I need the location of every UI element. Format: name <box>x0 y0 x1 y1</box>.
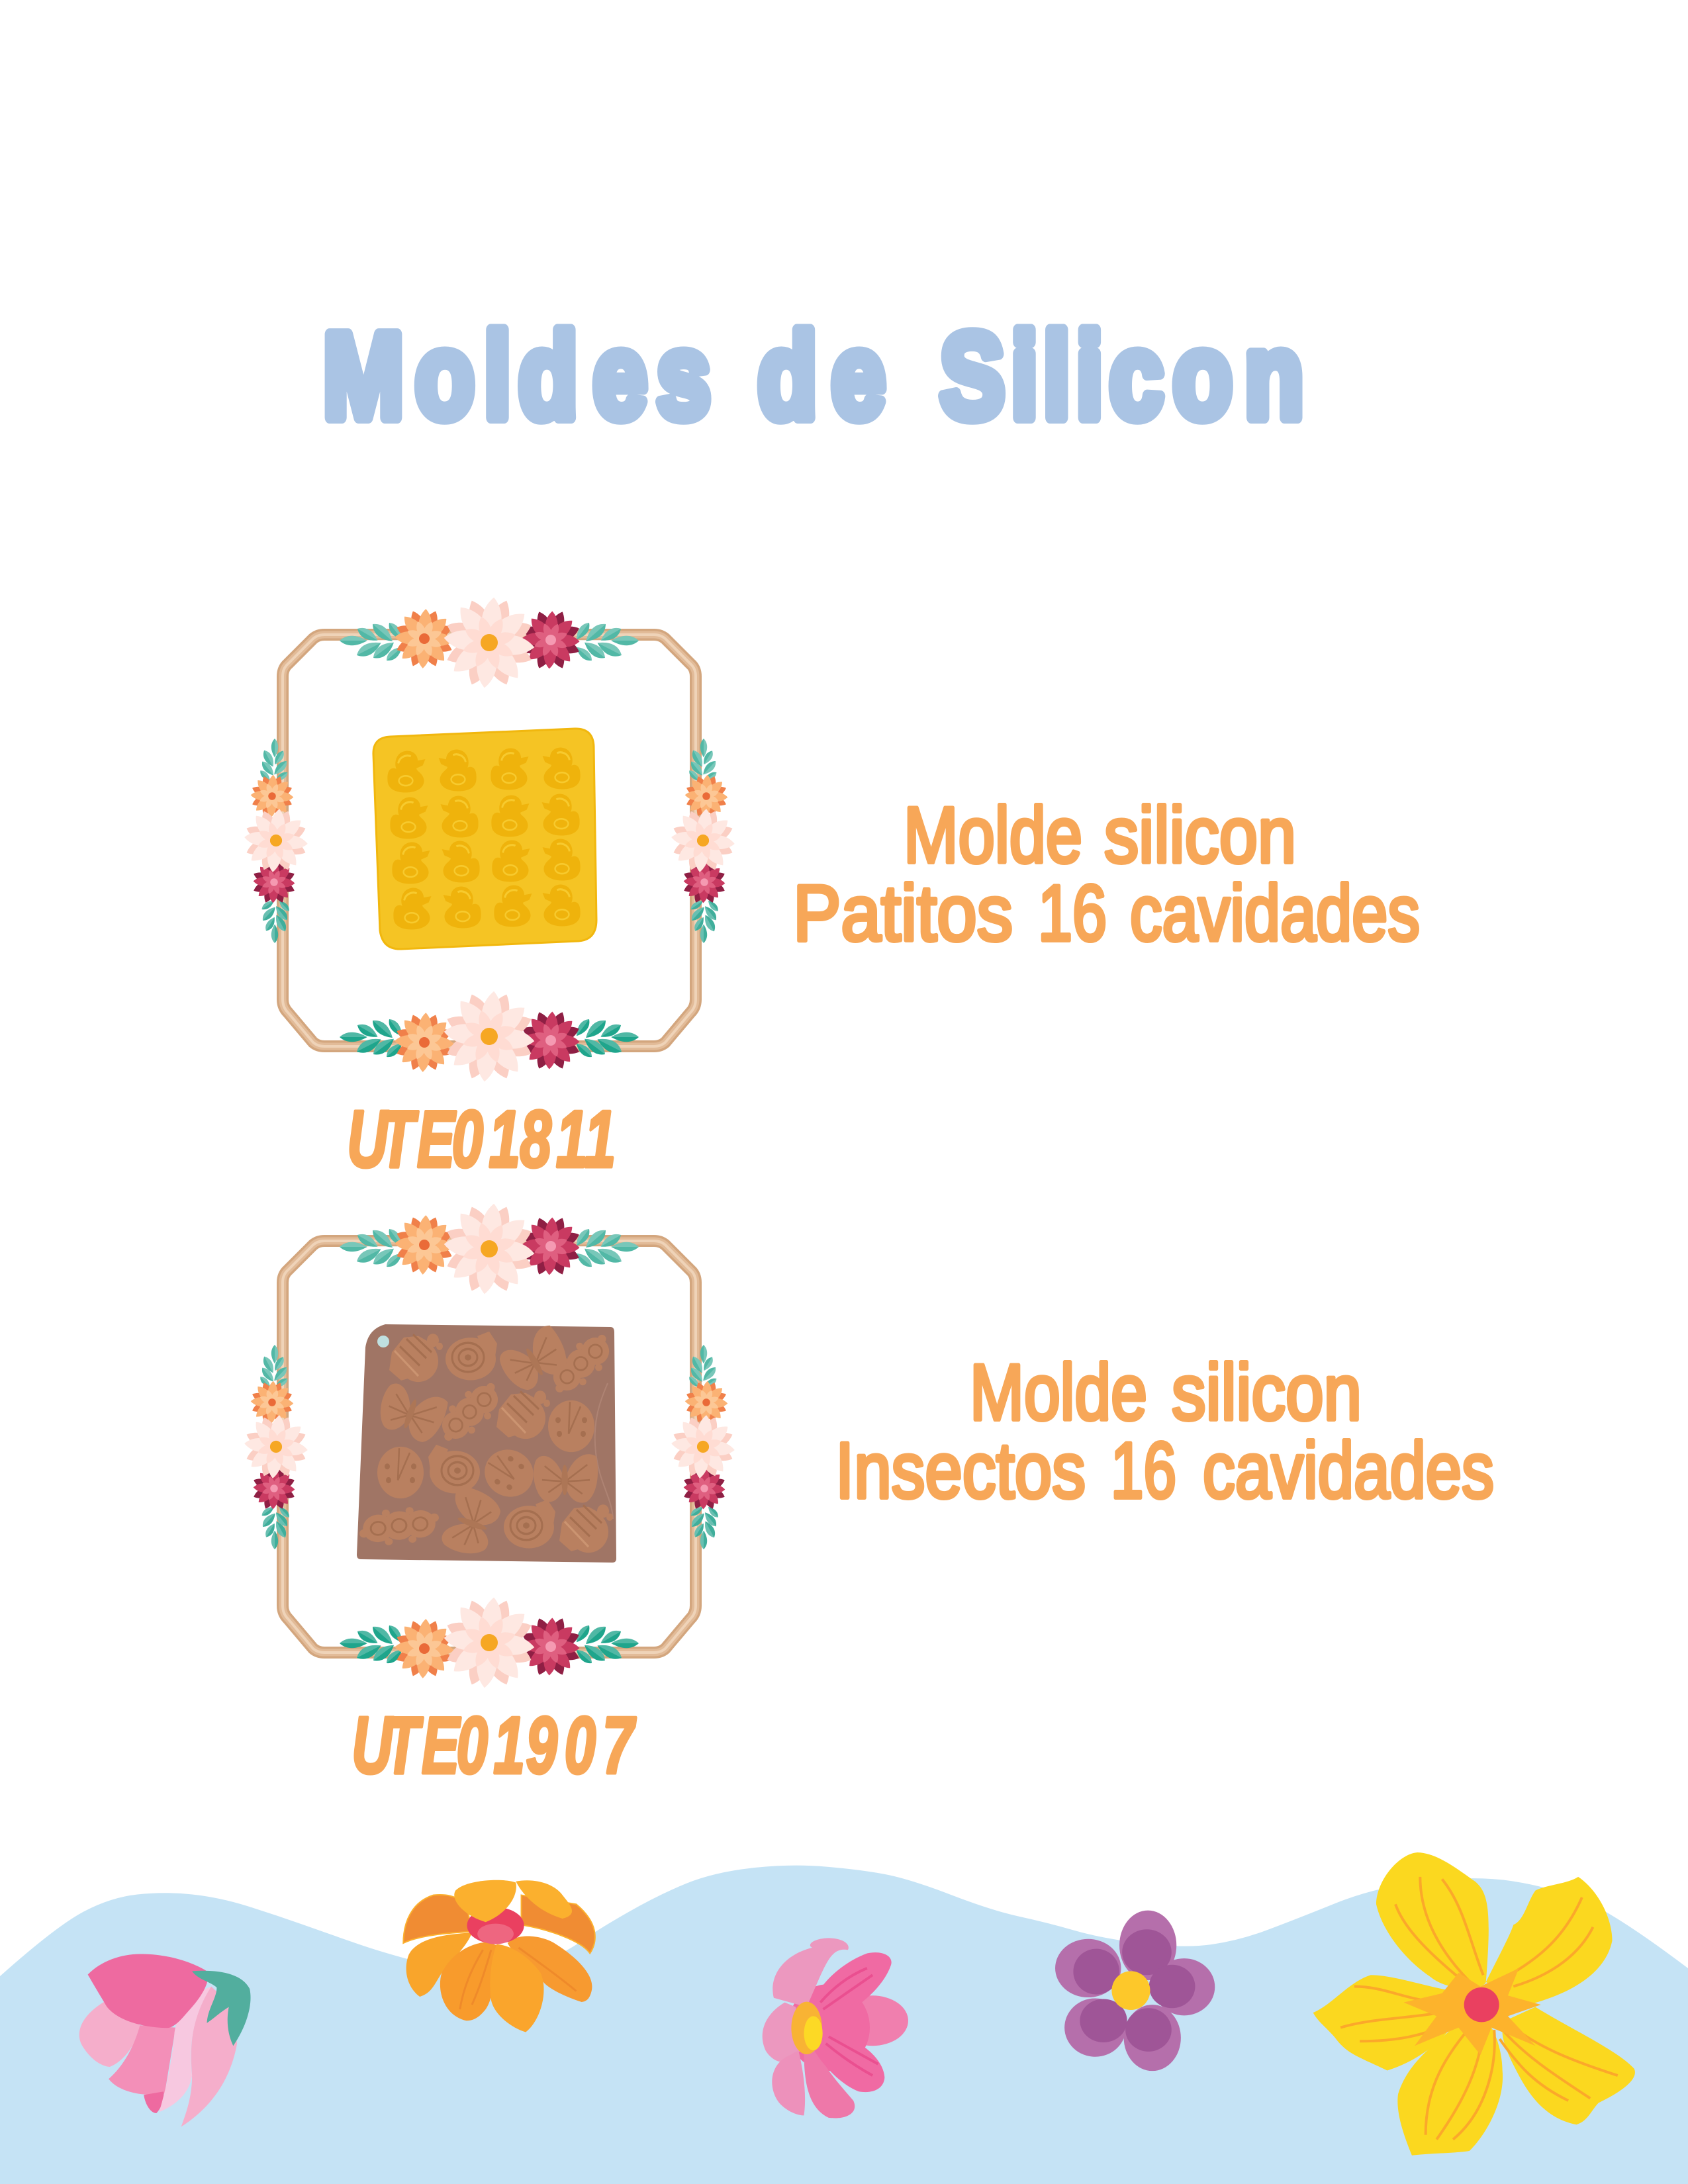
icon: pink rosebud <box>79 1954 251 2127</box>
text block: Insectos description: Molde <box>970 1348 1147 1437</box>
icon: pink flower <box>763 1938 908 2118</box>
blue wave background <box>0 1866 1688 2184</box>
text block: Insectos description <box>835 1348 1494 1515</box>
text block: Patitos description: Patitos <box>793 869 1013 958</box>
text block: Patitos description: silicon <box>1104 791 1296 880</box>
text block: Patitos description: cavidades <box>1130 869 1420 958</box>
icon: orange flower <box>403 1880 595 2032</box>
panel: product UTE01811 <box>234 583 745 1185</box>
icon: yellow flower <box>1313 1852 1635 2156</box>
product code UTE01811: UTE01811 <box>347 1095 616 1185</box>
icon: purple flower <box>1055 1911 1215 2071</box>
text block: Patitos description: 16 <box>1038 869 1107 958</box>
floral frame <box>234 583 745 1096</box>
text block: Insectos description: silicon <box>1172 1348 1362 1437</box>
text block: Insectos description: Insectos <box>835 1426 1086 1515</box>
text block: Insectos description: 16 <box>1111 1426 1176 1515</box>
text block: Patitos description: Molde <box>904 791 1082 880</box>
product code UTE01907: UTE01907 <box>352 1701 636 1791</box>
brown insects mold <box>357 1323 620 1563</box>
title: Moldes de Silicon <box>323 308 1303 444</box>
yellow duck mold <box>373 729 596 949</box>
panel: product UTE01907 <box>234 1189 745 1791</box>
floral frame <box>234 1189 745 1702</box>
text block: Insectos description: cavidades <box>1203 1426 1494 1515</box>
text block: Patitos description <box>793 791 1420 958</box>
